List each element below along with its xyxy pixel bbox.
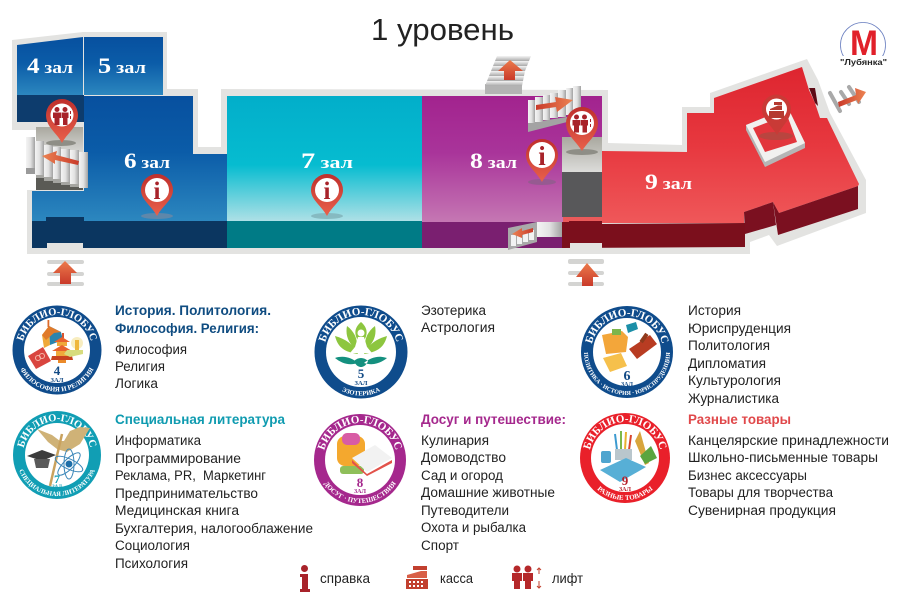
badge: hall 5: БИБЛИО-ГЛОБУС (318, 308, 404, 342)
badge: hall 7 (13, 411, 101, 499)
list: hall 8: Кулинария (421, 433, 489, 448)
pin: info hall 7: i (324, 178, 331, 205)
badge: hall 9: БИБЛИО-ГЛОБУС (583, 414, 667, 450)
badge: hall 5 (314, 306, 408, 398)
list: hall 9: Товары для творчества (688, 485, 833, 500)
list: hall 7: Программирование (115, 451, 241, 466)
cash desk counter (746, 108, 805, 167)
list: hall 6 (688, 303, 791, 406)
hall 9: 9 зал (645, 169, 693, 194)
badge: hall 5: ЗАЛ (355, 380, 368, 387)
hall 7: 7 зал (301, 148, 354, 173)
pin: info hall 8: i (538, 141, 546, 171)
badge: hall 9: 9 (622, 473, 629, 488)
pin: lift right (566, 107, 598, 155)
list: hall 8: Досуг и путешествие: (421, 412, 566, 427)
list: hall 8: Сад и огород (421, 468, 503, 483)
list: hall 4: Религия (115, 359, 165, 374)
list: hall 5 (421, 303, 495, 335)
hall 6 (32, 96, 227, 248)
legend: lift: лифт (552, 571, 583, 586)
badge: hall 8: ДОСУГ · ПУТЕШЕСТВИЯ (322, 480, 396, 503)
left staircase (26, 127, 88, 190)
badge: hall 7: 7 (54, 472, 60, 486)
badge: hall 6 (581, 306, 673, 398)
metro exit arrow (830, 87, 866, 111)
metro logo (838, 22, 888, 70)
list: hall 9: Разные товары (688, 412, 791, 427)
legend (300, 565, 583, 592)
badge: hall 6: 6 (624, 369, 630, 384)
list: hall 9: Школьно-письменные товары (688, 450, 878, 465)
title: 1 уровень (371, 12, 514, 47)
legend: info (300, 565, 370, 592)
top staircase (485, 56, 531, 94)
building outline (12, 32, 866, 254)
list: hall 8 (421, 412, 566, 553)
list: hall 7: Социология (115, 538, 190, 553)
legend: cash desk: касса (440, 571, 473, 586)
list: hall 6: Журналистика (688, 391, 779, 406)
badge: hall 9: ЗАЛ (619, 487, 632, 493)
floor plan (12, 32, 866, 286)
badge: hall 4: 4 (54, 363, 61, 378)
list: hall 9: Сувенирная продукция (688, 503, 836, 518)
list: hall 7: Бухгалтерия, налогооблажение (115, 521, 313, 536)
list: hall 7: Специальная литература (115, 412, 285, 427)
list: hall 7: Медицинская книга (115, 503, 239, 518)
list: hall 7: Предпринимательство (115, 486, 258, 501)
hall 7 (227, 96, 422, 248)
pin: info hall 8 (526, 139, 558, 185)
list: hall 5: Эзотерика (421, 303, 486, 318)
list: hall 9: Бизнес аксессуары (688, 468, 807, 483)
list: hall 6: Политология (688, 338, 770, 353)
badge: hall 5: 5 (358, 366, 365, 381)
list: hall 6: История (688, 303, 741, 318)
right staircase (528, 86, 581, 132)
legend: lift (512, 566, 583, 589)
bottom staircase (508, 222, 562, 250)
list: hall 8: Спорт (421, 538, 459, 553)
arrow: left stairs direction (42, 151, 79, 165)
list: hall 4: Логика (115, 376, 158, 391)
badge: hall 8: БИБЛИО-ГЛОБУС (317, 416, 402, 450)
badge: hall 8 (314, 414, 406, 506)
hall 8: 8 зал (470, 148, 518, 173)
badge: hall 4 (12, 306, 102, 394)
pin: info hall 6 (141, 174, 173, 219)
arrow: right stairs direction (536, 97, 573, 112)
badge: hall 6: ПОЛИТИКА · ИСТОРИЯ · ЮРИСПРУДЕНЦИЯ (584, 352, 670, 395)
badge: hall 6: ЗАЛ (621, 382, 634, 388)
metro logo: М (850, 24, 878, 63)
hall 8 (422, 96, 602, 248)
badge: hall 7: ЗАЛ (52, 485, 62, 490)
badge: hall 8: ЗАЛ (354, 489, 367, 495)
hall 5 (84, 37, 163, 95)
entrance arrow left (47, 260, 84, 286)
list: hall 5: Астрология (421, 320, 495, 335)
list: hall 4 (115, 303, 271, 391)
list: hall 4: Философия (115, 342, 187, 357)
badge: hall 4: ЗАЛ (51, 377, 64, 384)
legend: cash desk (406, 566, 473, 589)
list: hall 7: Психология (115, 556, 188, 571)
hall 4 (17, 37, 84, 122)
list: hall 9 (688, 412, 889, 518)
badge: hall 9 (580, 413, 670, 503)
pin: info hall 6: i (154, 178, 161, 205)
list: hall 6: Культурология (688, 373, 781, 388)
metro logo: "Лубянка" (840, 57, 887, 67)
hall 4: 4 зал (27, 53, 74, 78)
arrow: up stairs (498, 60, 523, 80)
list: hall 4: История. Политология. (115, 303, 271, 318)
badge: hall 9: РАЗНЫЕ ТОВАРЫ (597, 486, 653, 500)
list: hall 8: Домашние животные (421, 485, 555, 500)
badge: hall 5: ЭЗОТЕРИКА (342, 388, 380, 396)
badge: hall 7: БИБЛИО-ГЛОБУС (17, 414, 96, 448)
hall 5: 5 зал (98, 53, 147, 78)
entrance arrow right (568, 259, 604, 286)
badge: hall 8: 8 (357, 475, 364, 490)
list: hall 8: Охота и рыбалка (421, 520, 526, 535)
list: hall 7 (115, 412, 313, 571)
list: hall 8: Домоводство (421, 450, 506, 465)
badge: hall 6: БИБЛИО-ГЛОБУС (585, 308, 669, 344)
arrow: bottom stairs direction (512, 228, 533, 238)
hall 6: 6 зал (124, 148, 171, 173)
badge: hall 4: БИБЛИО-ГЛОБУС (16, 308, 97, 342)
list: hall 9: Канцелярские принадлежности (688, 433, 889, 448)
hall 9 (562, 67, 859, 248)
pin: lift left (46, 99, 78, 146)
list: hall 7: Информатика (115, 433, 201, 448)
legend: info: справка (320, 571, 370, 586)
list: hall 6: Дипломатия (688, 356, 766, 371)
list: hall 8: Путеводители (421, 503, 509, 518)
elevator shaft (562, 137, 602, 217)
badge: hall 4: ФИЛОСОФИЯ И РЕЛИГИЯ (21, 367, 94, 392)
pin: cash desk (759, 94, 793, 140)
list: hall 6: Юриспруденция (688, 321, 791, 336)
list: hall 7: Реклама, PR, Маркетинг (115, 468, 266, 483)
list: hall 4: Философия. Религия: (115, 321, 259, 336)
badge: hall 7: СПЕЦИАЛЬНАЯ ЛИТЕРАТУРА (20, 470, 95, 496)
pin: info hall 7 (311, 174, 343, 219)
